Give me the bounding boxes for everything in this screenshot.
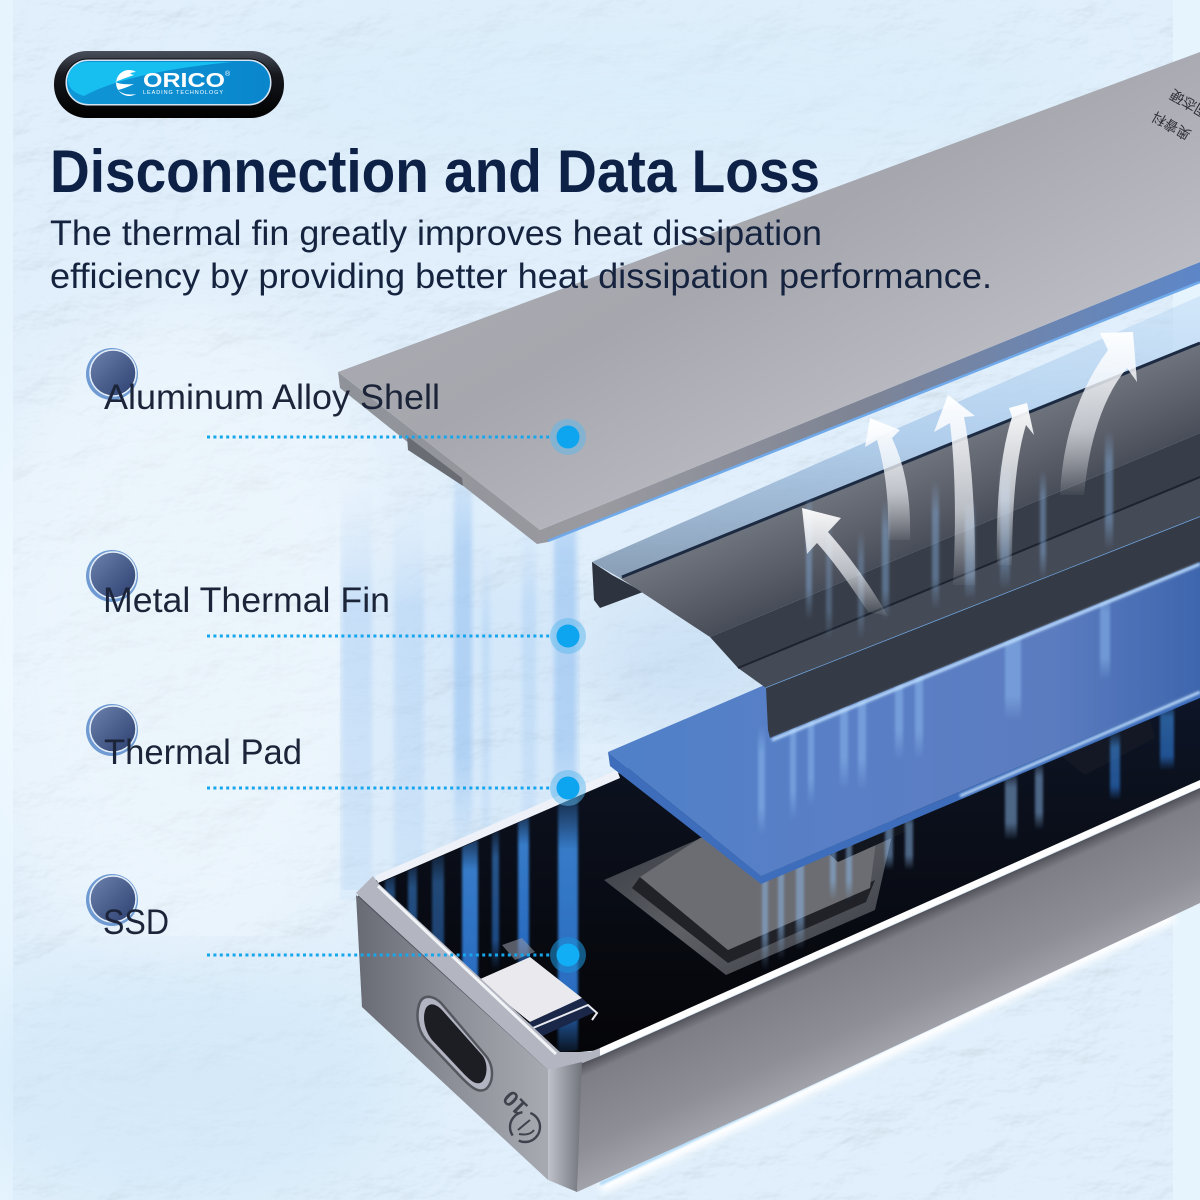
subtitle: The thermal fin greatly improves heat dissipation [50,214,822,253]
label: Thermal Pad [104,733,302,772]
shell top surface [338,52,1200,530]
beveled left rim [356,876,600,1070]
interior blue streaks [385,700,1174,1060]
marker ball [86,348,138,400]
logo mark [115,70,136,96]
fin lower step [710,433,1200,668]
subtitle [50,214,992,296]
enclosure interior [373,510,1200,1054]
target dot [550,419,586,455]
capacity badge [498,1085,540,1142]
callout: aluminum alloy shell [86,348,586,455]
target dot [550,770,586,806]
callout: SSD [86,874,586,973]
capacity badge: 10 [498,1085,533,1120]
USB-C connector block [478,938,597,1038]
pad streaks [758,590,1110,835]
shell edge [338,262,1200,544]
label: Aluminum Alloy Shell [104,378,440,417]
shell port notch [407,436,463,486]
light streaks rising behind the enclosure [340,410,580,900]
shell engraved marks: 奥睿科 [1149,108,1194,143]
arrow 3 [934,395,975,585]
registered mark: ® [225,70,231,78]
label: Metal Thermal Fin [103,581,390,620]
USB-C port [418,997,492,1091]
right side face [577,788,1200,1192]
marker ball [86,874,138,926]
callout: metal thermal fin [86,550,586,654]
fin main surface [620,343,1200,637]
logo wordmark: ORICO [143,70,225,92]
logo white ring [65,59,272,106]
subtitle: efficiency by providing better heat dissipation performance. [50,257,992,296]
leader line [207,954,552,956]
brand logo [54,51,284,118]
metal thermal fin [592,296,1200,740]
rounded front corner [548,1062,582,1192]
arrow 1 [802,508,888,616]
pad front edge [608,690,1200,884]
leader line [207,634,552,638]
rim highlight [375,770,1200,1055]
aluminum alloy shell [338,52,1200,544]
marker ball [86,704,138,756]
target dot [550,937,586,973]
marker ball [86,550,138,602]
title: Disconnection and Data Loss [50,138,820,205]
pad surface [608,495,1200,876]
logo blue pill [67,61,270,104]
fin left lip [592,562,643,608]
label: SSD [103,903,169,942]
fin translucent upper surface [592,296,1200,578]
arrow 4 [997,403,1034,565]
logo outer bezel [54,51,284,118]
target dot [550,618,586,654]
fin streaks [806,430,1113,640]
logo tagline: LEADING TECHNOLOGY [143,90,223,96]
leader line [207,436,552,438]
thermal pad [608,495,1200,884]
soft glow under the body [600,912,1173,1186]
SSD enclosure base [356,690,1200,1194]
shell engraved marks [1149,86,1200,143]
arrow 5 [1060,332,1137,495]
leader line [207,786,552,790]
callout: thermal pad [86,704,586,806]
front face with port [356,895,548,1180]
fin front lip [766,517,1200,738]
heat flow arrows [802,332,1137,616]
arrow 2 [865,418,910,540]
SSD chip plate [604,720,1155,975]
